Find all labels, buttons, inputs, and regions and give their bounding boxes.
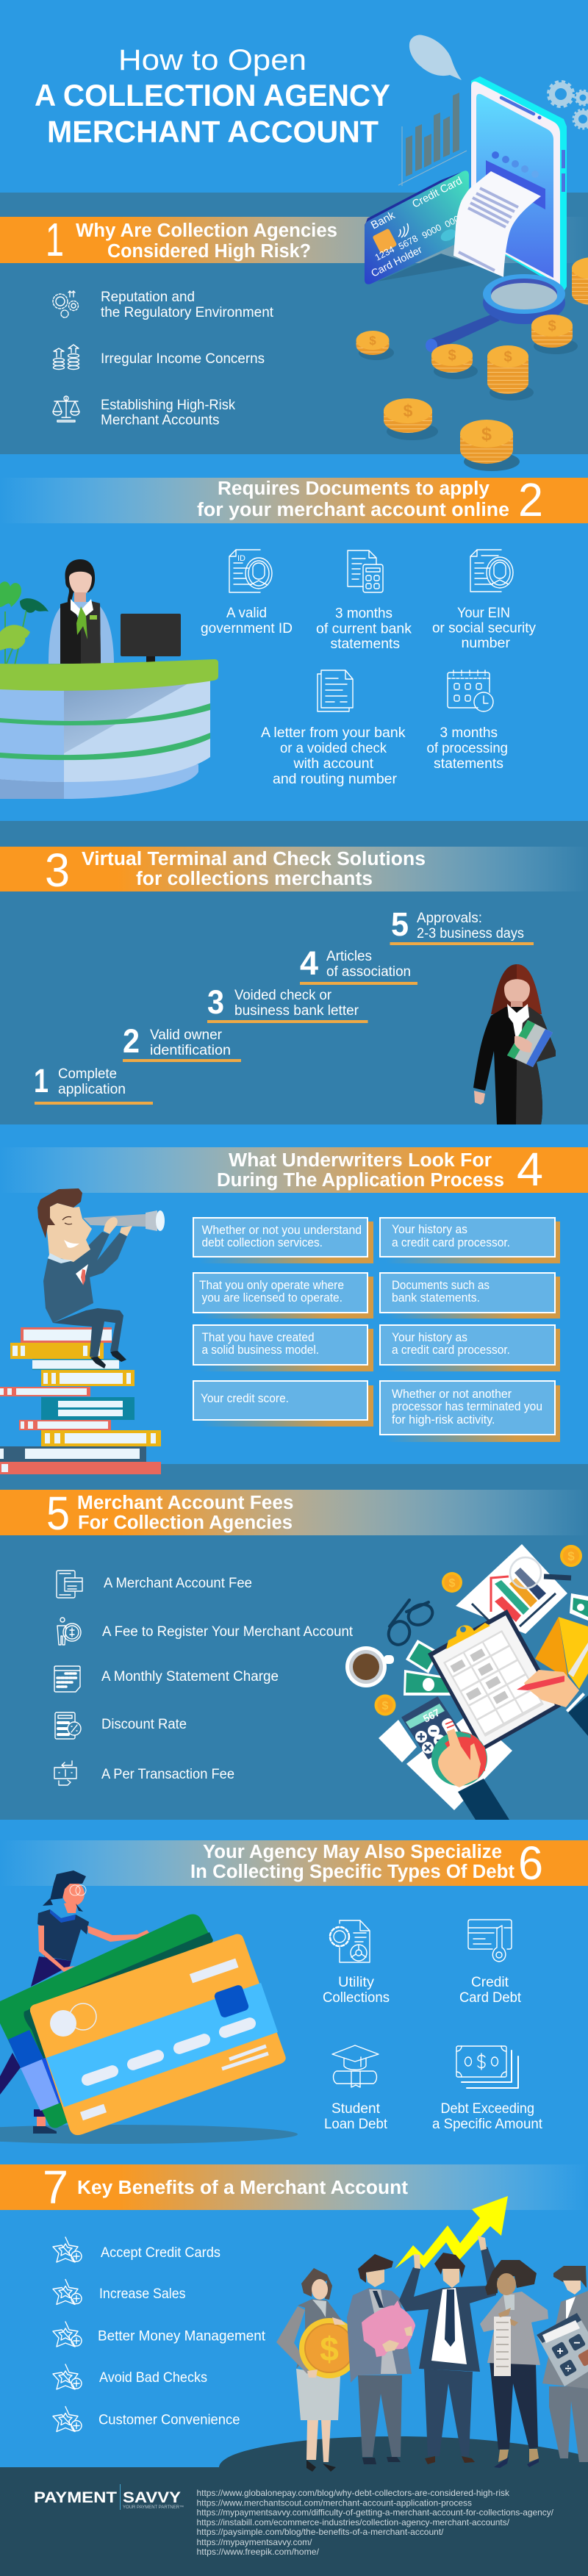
credit card: Credit Card: [410, 175, 465, 211]
heading band: section 2: for your merchant account online: [197, 500, 509, 520]
icon: calendar with clock: [448, 670, 493, 711]
step 1: Complete: [58, 1066, 117, 1082]
plant: [0, 581, 49, 665]
icon: calculator percent: [55, 1712, 81, 1739]
icon: star: [53, 2406, 82, 2431]
heading band: section 4: What Underwriters Look For: [229, 1150, 492, 1171]
document grid: section 2: of current bank: [316, 622, 412, 636]
box: credit score: [193, 1381, 373, 1427]
woman with receipt: [480, 2260, 548, 2468]
step 1: 1: [34, 1062, 49, 1099]
box: processor history: [380, 1218, 560, 1263]
debt types grid: [323, 1920, 543, 2132]
document grid: section 2: with account: [293, 756, 374, 772]
coin: [375, 1695, 395, 1715]
growth arrow: [395, 2196, 508, 2269]
man raising arrow: [399, 2236, 496, 2464]
step 1: application: [58, 1082, 126, 1097]
box: processor history: Your history as: [392, 1222, 467, 1236]
box: terminated: for high-risk activity.: [392, 1413, 495, 1427]
footer logo: [34, 2484, 184, 2510]
credit card: Bank: [369, 209, 398, 232]
list: section 1 risks: [53, 290, 274, 428]
heading band: section 2: 2: [518, 473, 543, 526]
heading band: section 5: [0, 1487, 588, 1540]
step 4: [300, 944, 417, 985]
document grid: section 2: A letter from your bank: [261, 725, 406, 741]
coin stack: [572, 257, 588, 305]
clipboard: [428, 1610, 561, 1751]
box: documents: Documents such as: [392, 1278, 490, 1292]
bar chart: [398, 93, 467, 186]
step 3: Voided check or: [234, 988, 332, 1003]
box: understand services: Whether or not you understand: [201, 1223, 362, 1237]
coin: $: [382, 1700, 389, 1712]
box: understand services: debt collection services.: [201, 1235, 323, 1249]
box: documents: [380, 1273, 560, 1319]
footer sources: https://www.merchantscout.com/merchant-account-application-process: [197, 2497, 472, 2508]
document grid: section 2: or social security: [432, 620, 536, 636]
title: How to Open: [118, 44, 306, 76]
illustration: businesswoman with folders: [473, 964, 556, 1124]
document grid: section 2: and routing number: [273, 772, 398, 787]
list: key benefits: Increase Sales: [99, 2286, 185, 2302]
icon: scales: [53, 396, 79, 422]
document grid: section 2: statements: [331, 636, 400, 652]
heading band: section 1: 1: [46, 213, 64, 266]
box: credit score: Your credit score.: [201, 1391, 289, 1405]
heading band: section 3: [0, 844, 588, 897]
step 1: [34, 1062, 153, 1105]
box: business model: a solid business model.: [201, 1343, 319, 1357]
woman with coin: [276, 2268, 359, 2472]
coin: [560, 1545, 582, 1567]
footer background and mound: [0, 2436, 588, 2576]
heading band: section 1: Why Are Collection Agencies: [76, 220, 337, 241]
icon: star: [53, 2322, 82, 2347]
coin stack: $: [503, 349, 512, 365]
step 5: 5: [391, 905, 409, 943]
heading band: section 5: For Collection Agencies: [78, 1513, 293, 1533]
coin stack: $: [404, 401, 413, 420]
illustration: desk with clipboard, coffee, coins: [345, 1544, 588, 1820]
man: [37, 1188, 132, 1368]
step 3: 3: [207, 983, 224, 1021]
envelope: [535, 1593, 588, 1689]
phone: [471, 76, 567, 290]
heading band: section 5: Merchant Account Fees: [77, 1493, 294, 1513]
monitor: [121, 614, 181, 663]
box: business model: That you have created: [201, 1330, 315, 1344]
calculator: 567: [421, 1706, 442, 1725]
credit card: Card Holder: [369, 243, 424, 279]
coin stack: [384, 398, 438, 440]
paper bottom: [406, 1712, 512, 1810]
coin stack: [460, 420, 520, 471]
list: section 1 risks: Irregular Income Concerns: [101, 351, 265, 367]
heading band: section 3: Virtual Terminal and Check Solutions: [82, 849, 426, 869]
heading band: section 6: [0, 1837, 588, 1890]
heading band: section 7: [0, 2161, 588, 2214]
illustration: man with telescope on books: [0, 1188, 165, 1474]
icon: person with coin: [57, 1618, 81, 1645]
icon: star: [53, 2237, 82, 2262]
orange card: [30, 1934, 286, 2135]
heading band: section 6: Your Agency May Also Specialize: [203, 1842, 502, 1862]
document grid: section 2: 3 months: [440, 725, 498, 741]
coin stack: [531, 315, 578, 354]
stack of books: [0, 1327, 161, 1474]
icon: device with card: [57, 1571, 82, 1598]
icon: stacked coins with arrows: [53, 345, 79, 369]
hand on calculator: [431, 1729, 509, 1820]
icon: letter document: [318, 670, 353, 711]
document grid: section 2: or a voided check: [280, 741, 387, 756]
footer logo: SAVVY: [123, 2489, 181, 2506]
heading band: section 7: Key Benefits of a Merchant Account: [77, 2178, 409, 2198]
coin: $: [449, 1577, 456, 1590]
document grid: section 2: A valid: [226, 606, 267, 621]
credit card: 1234: [373, 244, 396, 263]
debt types grid: Student: [331, 2101, 381, 2117]
debt types grid: Utility: [338, 1975, 375, 1990]
document grid: section 2: government ID: [201, 621, 293, 636]
step 4: of association: [326, 964, 411, 980]
list: key benefits: [53, 2237, 266, 2431]
step 3: [207, 983, 368, 1023]
footer sources: https://www.freepik.com/home/: [197, 2547, 320, 2557]
step 4: Articles: [326, 949, 372, 964]
box: licensed: you are licensed to operate.: [201, 1291, 343, 1305]
document grid: section 2: [201, 550, 536, 787]
credit card: [365, 171, 476, 284]
title: [35, 44, 390, 148]
icon: star: [53, 2280, 82, 2305]
gears: [548, 82, 588, 129]
debt types grid: Debt Exceeding: [441, 2101, 534, 2117]
icon: government ID: [229, 550, 272, 592]
icon: graduation: [332, 2045, 379, 2087]
box: processor history repeat: [380, 1325, 560, 1371]
list: merchant fees: A Fee to Register Your Merchant Account: [102, 1624, 354, 1640]
coin: [442, 1572, 462, 1593]
man with calculator: ÷: [565, 2363, 572, 2375]
step 2: 2: [123, 1022, 140, 1060]
coin stack: [431, 344, 478, 379]
staircase steps: [34, 905, 534, 1105]
document grid: section 2: number: [462, 636, 511, 651]
step 2: [123, 1022, 241, 1062]
box: documents: bank statements.: [392, 1291, 480, 1305]
receipt: [453, 171, 541, 277]
box: processor history repeat: a credit card processor.: [392, 1343, 510, 1357]
illustration: phone, card, receipt and coins: [356, 35, 588, 471]
box: terminated: Whether or not another: [392, 1387, 512, 1401]
title: A COLLECTION AGENCY: [35, 78, 390, 112]
box: terminated: [380, 1381, 560, 1442]
document grid: section 2: ID: [237, 554, 245, 563]
heading band: section 5: 5: [46, 1487, 70, 1540]
speech bubble: [409, 35, 462, 80]
illustration: woman with credit cards: [0, 1870, 298, 2144]
debt types grid: a Specific Amount: [432, 2117, 543, 2132]
glasses: [385, 1600, 436, 1648]
woman with coin: $: [320, 2330, 339, 2368]
list: merchant fees: A Merchant Account Fee: [104, 1576, 252, 1591]
box: business model: [193, 1325, 373, 1371]
coin: $: [567, 1549, 575, 1563]
list: merchant fees: [54, 1571, 354, 1785]
step 3: business bank letter: [234, 1003, 359, 1019]
document grid: section 2: statements: [434, 756, 503, 772]
heading band: section 6: 6: [518, 1837, 543, 1890]
heading band: section 1: Considered High Risk?: [107, 241, 311, 262]
table grid: [443, 1630, 544, 1737]
step 2: identification: [150, 1043, 231, 1058]
icon: monthly calendar: [54, 1666, 80, 1692]
icon: utility: [330, 1920, 370, 1962]
magnifier: [426, 274, 565, 352]
icon: EIN document: [470, 550, 513, 592]
box: licensed: [193, 1273, 373, 1319]
debt types grid: Loan Debt: [324, 2117, 388, 2132]
receptionist: [49, 559, 114, 664]
list: section 1 risks: Establishing High-Risk: [101, 398, 235, 413]
man with calculator: −: [573, 2337, 581, 2350]
illustration: receptionist at desk: [0, 559, 218, 799]
footer sources: [197, 2488, 554, 2557]
box: understand services: [193, 1218, 373, 1263]
hand with pen: [517, 1670, 588, 1736]
coin stack: $: [548, 318, 556, 334]
heading band: section 4: 4: [517, 1143, 543, 1196]
list: section 1 risks: Merchant Accounts: [101, 413, 219, 428]
box: terminated: processor has terminated you: [392, 1399, 542, 1413]
banknotes: [404, 1640, 451, 1696]
coin stack: [487, 345, 534, 401]
heading band: section 4: During The Application Process: [217, 1170, 504, 1191]
woman: [0, 1870, 149, 2134]
desk: [0, 659, 218, 799]
step 5: Approvals:: [417, 911, 482, 926]
small paper: [379, 1720, 417, 1762]
box: processor history repeat: Your history as: [392, 1330, 467, 1344]
list: key benefits: Accept Credit Cards: [101, 2245, 220, 2261]
green card: [0, 1914, 213, 2128]
document grid: section 2: 3 months: [335, 606, 392, 622]
man with piggy bank: [347, 2254, 415, 2464]
coin stack: $: [369, 334, 376, 348]
heading band: section 3: for collections merchants: [136, 869, 373, 889]
icon: gears: [53, 291, 78, 317]
coin stack: $: [481, 424, 492, 445]
coin stack: [356, 331, 394, 360]
list: key benefits: Better Money Management: [98, 2328, 266, 2344]
debt types grid: Credit: [471, 1975, 509, 1990]
checklist boxes: [193, 1218, 560, 1442]
icon: credit card key: [468, 1920, 512, 1962]
step 5: [390, 905, 534, 945]
heading band: section 4: [0, 1143, 588, 1196]
credit card: 000: [443, 213, 462, 230]
ground shadow: [0, 2125, 298, 2144]
list: merchant fees: A Per Transaction Fee: [101, 1767, 234, 1782]
icon: bank statements: [348, 550, 383, 592]
footer sources: https://mypaymentsavvy.com/difficulty-of-getting-a-merchant-account-for-collections-agency/: [197, 2508, 554, 2518]
heading band: section 3: 3: [45, 844, 70, 897]
document grid: section 2: of processing: [426, 741, 508, 756]
credit card: 9000: [420, 222, 443, 241]
debt types grid: Collections: [323, 1990, 390, 2006]
footer logo: PAYMENT: [34, 2489, 117, 2506]
step 4: 4: [300, 944, 318, 982]
credit card: 5678: [397, 233, 420, 252]
list: merchant fees: A Monthly Statement Charge: [101, 1669, 279, 1685]
coin stack: $: [448, 348, 456, 364]
title: MERCHANT ACCOUNT: [47, 115, 379, 148]
paper with charts: [456, 1544, 571, 1634]
coffee cup: [345, 1646, 394, 1687]
telescope: [83, 1210, 165, 1231]
heading band: section 2: Requires Documents to apply: [218, 478, 490, 499]
footer sources: https://instabill.com/ecommerce-industries/collection-agency-merchant-accounts/: [197, 2517, 510, 2527]
step 5: 2-3 business days: [417, 926, 524, 941]
heading band: section 2: [0, 473, 588, 526]
step 2: Valid owner: [150, 1027, 223, 1043]
man with calculator: +: [556, 2345, 564, 2358]
footer sources: https://paysimple.com/blog/the-benefits-of-a-merchant-account/: [197, 2527, 444, 2537]
heading band: section 6: In Collecting Specific Types Of Debt: [190, 1862, 515, 1882]
list: section 1 risks: Reputation and: [101, 290, 195, 305]
footer logo: YOUR PAYMENT PARTNER™: [123, 2505, 184, 2510]
calculator: [403, 1698, 463, 1758]
footer sources: https://www.globalonepay.com/blog/why-debt-collectors-are-considered-high-risk: [197, 2488, 510, 2498]
heading band: section 7: 7: [43, 2161, 68, 2214]
list: key benefits: Avoid Bad Checks: [99, 2370, 207, 2386]
heading band: section 1: [0, 213, 588, 266]
list: section 1 risks: the Regulatory Environment: [101, 305, 274, 320]
box: processor history: a credit card processor.: [392, 1235, 510, 1249]
box: licensed: That you only operate where: [199, 1278, 344, 1292]
icon: money transfer: [54, 1761, 76, 1785]
list: merchant fees: Discount Rate: [101, 1717, 187, 1732]
debt types grid: Card Debt: [459, 1990, 522, 2006]
footer sources: https://mypaymentsavvy.com/: [197, 2537, 312, 2547]
document grid: section 2: Your EIN: [457, 606, 510, 621]
icon: star: [53, 2364, 82, 2389]
list: key benefits: Customer Convenience: [98, 2412, 240, 2428]
icon: banknotes: [456, 2046, 518, 2088]
